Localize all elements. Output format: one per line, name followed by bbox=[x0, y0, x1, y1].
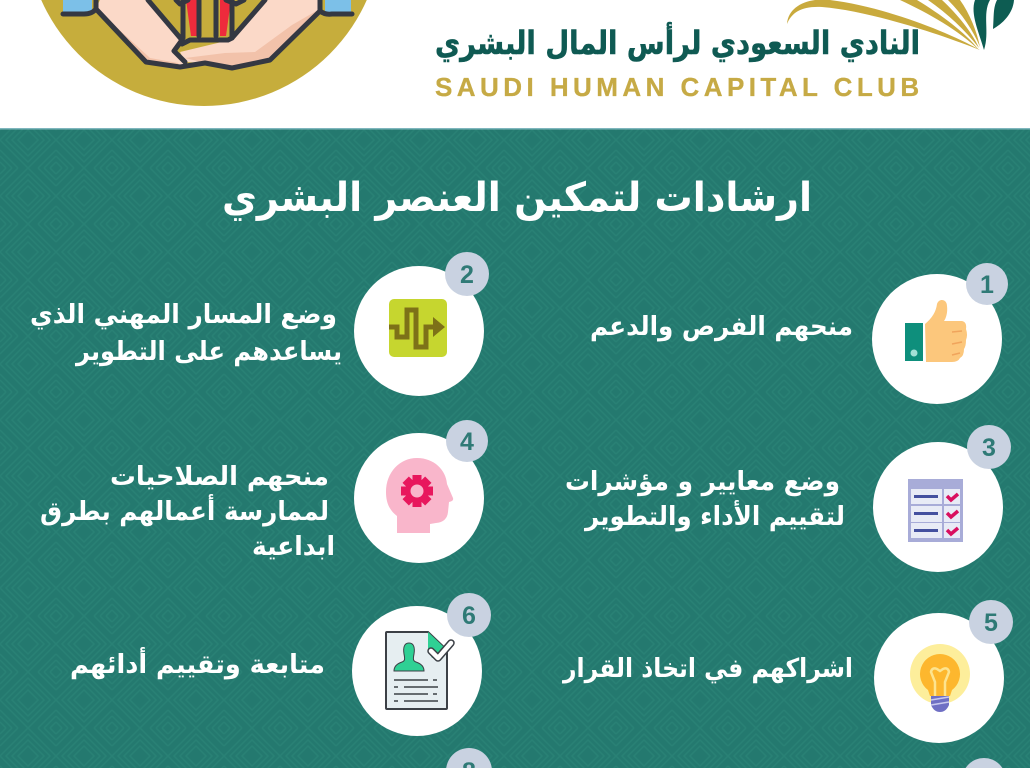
badge 3: 3 bbox=[982, 434, 996, 462]
text 3 bbox=[565, 467, 845, 532]
badge 2 bbox=[445, 252, 489, 296]
badge 1 bbox=[966, 263, 1008, 305]
text 3: وضع معايير و مؤشرات bbox=[565, 467, 840, 497]
partial badge bottom left bbox=[446, 748, 492, 768]
icon: career path arrow bbox=[389, 299, 447, 357]
icon: head with gear bbox=[386, 458, 453, 533]
circle 3 bbox=[873, 442, 1003, 572]
badge 3 bbox=[967, 425, 1011, 469]
item 5 bbox=[561, 600, 1013, 743]
logo English name: SAUDI HUMAN CAPITAL CLUB bbox=[435, 72, 924, 102]
icon: thumbs up bbox=[905, 300, 967, 362]
text 4: ابداعية bbox=[252, 532, 335, 562]
partial badge bottom right bbox=[962, 758, 1006, 768]
badge 5: 5 bbox=[984, 609, 998, 637]
main title: ارشادات لتمكين العنصر البشري bbox=[222, 175, 812, 221]
badge 2: 2 bbox=[460, 261, 474, 289]
circle 5 bbox=[874, 613, 1004, 743]
text 4: منحهم الصلاحيات bbox=[110, 462, 329, 492]
badge 4 bbox=[446, 420, 488, 462]
circle 1 bbox=[872, 274, 1002, 404]
item 3 bbox=[565, 425, 1011, 572]
text 5: اشراكهم في اتخاذ القرار bbox=[561, 654, 853, 684]
text 2: يساعدهم على التطوير bbox=[74, 337, 342, 367]
logo Arabic name: النادي السعودي لرأس المال البشري bbox=[435, 22, 920, 62]
item 2 bbox=[30, 252, 489, 396]
badge 6 bbox=[447, 593, 491, 637]
badge 6: 6 bbox=[462, 602, 476, 630]
illustration: hands holding a gift bbox=[26, 0, 382, 106]
text 2: وضع المسار المهني الذي bbox=[30, 300, 337, 330]
item 6 bbox=[70, 593, 491, 736]
badge 1: 1 bbox=[980, 271, 994, 299]
item 4 bbox=[40, 420, 488, 563]
text 3: لتقييم الأداء والتطوير bbox=[583, 500, 845, 532]
item 1 bbox=[590, 263, 1008, 404]
text 4: لممارسة أعمالهم بطرق bbox=[40, 494, 329, 527]
icon: light bulb bbox=[910, 644, 970, 712]
circle 2 bbox=[354, 266, 484, 396]
circle 6 bbox=[352, 606, 482, 736]
badge 5 bbox=[969, 600, 1013, 644]
icon: resume with check bbox=[386, 632, 451, 709]
text 1: منحهم الفرص والدعم bbox=[590, 312, 853, 342]
text 6: متابعة وتقييم أدائهم bbox=[70, 647, 325, 680]
circle 4 bbox=[354, 433, 484, 563]
logo bbox=[435, 0, 1014, 102]
text 4 bbox=[40, 462, 335, 562]
logo mark: gold and green palm fronds bbox=[787, 0, 1014, 50]
badge 4: 4 bbox=[460, 428, 474, 456]
header band bbox=[0, 0, 1030, 129]
text 2 bbox=[30, 300, 342, 367]
icon: checklist bbox=[908, 479, 963, 542]
